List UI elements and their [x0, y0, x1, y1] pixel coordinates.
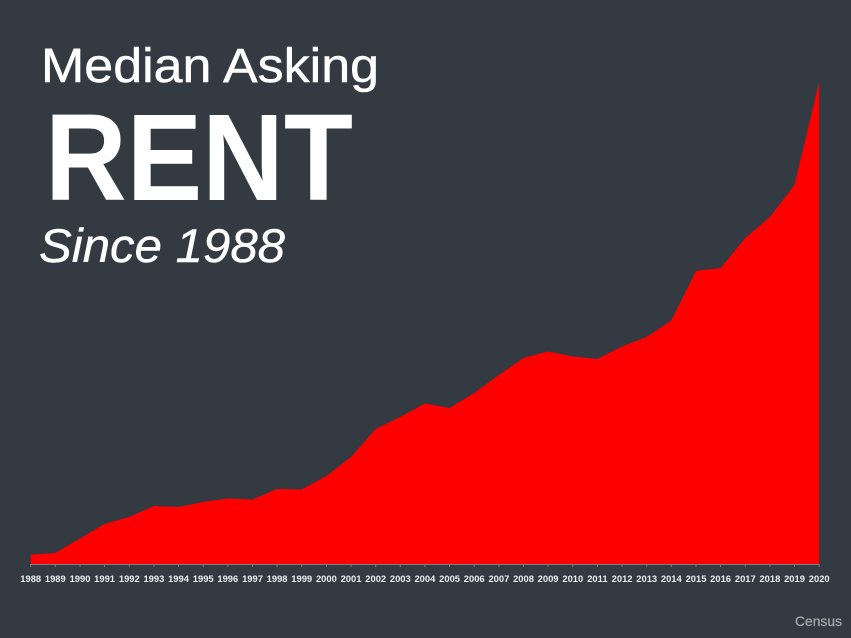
x axis year labels: 2002 [365, 573, 386, 584]
x axis year labels: 1993 [143, 573, 164, 584]
x axis year labels: 2013 [636, 573, 657, 584]
x axis year labels: 1988 [20, 573, 41, 584]
title: Median Asking: Median Asking [41, 40, 379, 93]
x axis line and ticks [31, 564, 819, 567]
source: Census: Census [795, 613, 842, 629]
x axis year labels: 2005 [439, 573, 460, 584]
x axis year labels: 2017 [735, 573, 756, 584]
title: RENT: RENT [45, 90, 353, 227]
x axis year labels [20, 573, 830, 584]
x axis year labels: 1989 [45, 573, 66, 584]
x axis year labels: 2018 [759, 573, 780, 584]
x axis year labels: 1992 [119, 573, 140, 584]
x axis year labels: 1999 [291, 573, 312, 584]
x axis year labels: 2012 [612, 573, 633, 584]
x axis year labels: 2000 [316, 573, 337, 584]
x axis year labels: 2010 [562, 573, 583, 584]
subtitle: Since 1988: Since 1988 [39, 219, 285, 272]
area chart: median asking rent 1988-2020 [31, 82, 819, 564]
x axis year labels: 2016 [710, 573, 731, 584]
x axis year labels: 1990 [70, 573, 90, 584]
x axis year labels: 2008 [513, 573, 534, 584]
x axis year labels: 2014 [661, 573, 683, 584]
x axis year labels: 1997 [242, 573, 263, 584]
x axis year labels: 1994 [168, 573, 190, 584]
x axis year labels: 2004 [414, 573, 436, 584]
x axis year labels: 2006 [464, 573, 485, 584]
x axis year labels: 1998 [267, 573, 288, 584]
x axis year labels: 2011 [587, 573, 608, 584]
x axis year labels: 2009 [538, 573, 559, 584]
x axis year labels: 1996 [217, 573, 238, 584]
x axis year labels: 2020 [809, 573, 830, 584]
x axis year labels: 2003 [390, 573, 411, 584]
x axis year labels: 2007 [488, 573, 509, 584]
x axis year labels: 1991 [94, 573, 115, 584]
x axis year labels: 2019 [784, 573, 805, 584]
x axis year labels: 2001 [341, 573, 361, 584]
x axis year labels: 1995 [193, 573, 214, 584]
x axis year labels: 2015 [686, 573, 706, 584]
